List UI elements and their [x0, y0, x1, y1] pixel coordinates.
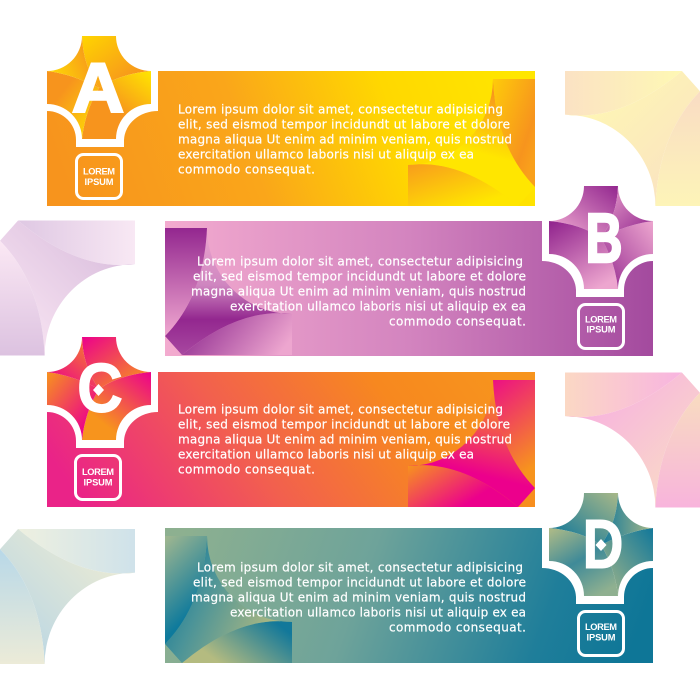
body text D: magna aliqua Ut enim ad minim veniam, quis nostrud [191, 591, 526, 605]
label box C [76, 456, 120, 500]
body text A: magna aliqua Ut enim ad minim veniam, quis nostrud [178, 132, 512, 146]
corner decoration D [165, 536, 292, 663]
panel: B purple banner [165, 186, 653, 356]
label box B [578, 304, 624, 348]
label box A: LOREM [83, 167, 115, 177]
ghost shape: right pale pink [565, 372, 700, 508]
body text C: magna aliqua Ut enim ad minim veniam, quis nostrud [178, 433, 512, 447]
ghost shape: left pale teal [0, 529, 135, 664]
body text C: exercitation ullamco laboris nisi ut aliquip ex ea [178, 448, 474, 462]
body text C [178, 403, 512, 477]
corner decoration A [408, 79, 535, 206]
label box D: IPSUM [586, 633, 616, 643]
corner decoration B [165, 228, 292, 355]
body text B: magna aliqua Ut enim ad minim veniam, quis nostrud [191, 285, 526, 299]
body text C: commodo consequat. [178, 463, 315, 477]
letter A: A [72, 49, 124, 127]
letter D with diamond: D [582, 505, 624, 583]
panel: D teal banner [165, 493, 653, 663]
cross badge A [47, 36, 158, 147]
body text B [191, 255, 526, 329]
body text B: commodo consequat. [389, 315, 526, 329]
body text D: commodo consequat. [389, 621, 526, 635]
label box D [578, 612, 624, 656]
body text C: Lorem ipsum dolor sit amet, consectetur adipisicing [178, 403, 503, 417]
body text B: exercitation ullamco laboris nisi ut aliquip ex ea [230, 300, 526, 314]
body text D: elit, sed eismod tempor incidundt ut labore et dolore [193, 576, 526, 590]
label box C: IPSUM [84, 478, 113, 488]
body text A: Lorem ipsum dolor sit amet, consectetur adipisicing [178, 102, 503, 116]
body text D: Lorem ipsum dolor sit amet, consectetur adipisicing [197, 561, 523, 575]
body text D: exercitation ullamco laboris nisi ut aliquip ex ea [230, 606, 526, 620]
cross badge D [542, 493, 653, 604]
letter C with diamond: C [77, 349, 123, 427]
ghost shape: top right pale yellow [565, 71, 700, 206]
banner background C [47, 372, 535, 507]
body text C: elit, sed eismod tempor incidundt ut labore et dolore [178, 418, 510, 432]
banner background B [165, 221, 653, 356]
letter B: B [586, 199, 622, 277]
body text A [178, 102, 512, 176]
body text A: commodo consequat. [178, 162, 315, 176]
label box B: LOREM [585, 314, 617, 324]
body text B: elit, sed eismod tempor incidundt ut labore et dolore [193, 270, 526, 284]
panel: C magenta banner [47, 337, 535, 507]
corner decoration C [408, 380, 535, 507]
label box A [76, 154, 122, 198]
label box B: IPSUM [586, 325, 616, 335]
label box A: IPSUM [84, 177, 114, 187]
panel: A orange banner [47, 36, 535, 206]
cross badge C [47, 337, 158, 448]
body text B: Lorem ipsum dolor sit amet, consectetur adipisicing [197, 255, 523, 269]
body text A: elit, sed eismod tempor incidundt ut labore et dolore [178, 117, 510, 131]
banner background D [165, 528, 653, 663]
body text A: exercitation ullamco laboris nisi ut aliquip ex ea [178, 147, 474, 161]
body text D [191, 561, 526, 635]
label box D: LOREM [585, 622, 617, 632]
cross badge B [542, 186, 653, 297]
banner background A [47, 71, 535, 206]
label box C: LOREM [82, 467, 114, 477]
ghost shape: left pale purple [0, 220, 135, 356]
